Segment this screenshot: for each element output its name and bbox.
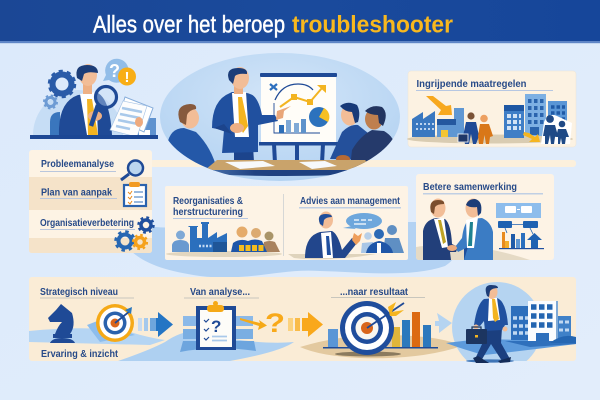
icon: factory	[412, 108, 464, 137]
arrow: small orange	[240, 318, 267, 330]
desk	[30, 135, 158, 139]
person group with halo	[541, 115, 572, 144]
heading: Ingrijpende maatregelen	[416, 78, 526, 90]
illustration: presentation scene	[160, 53, 400, 181]
label: van analyse: Van analyse...	[190, 287, 250, 298]
arrow: orange	[288, 312, 323, 337]
person: left colleague	[167, 104, 217, 172]
icon: downward arrow	[426, 96, 452, 115]
label: naar resultaat: ...naar resultaat	[340, 287, 409, 298]
person: analyst	[59, 64, 112, 135]
label: ervaring en inzicht: Ervaring & inzicht	[41, 349, 119, 360]
person: advisor	[305, 212, 362, 258]
icon: blue gear	[116, 232, 134, 250]
arrow: light blue	[435, 313, 452, 333]
person: walker with briefcase	[466, 285, 514, 363]
conference table	[208, 160, 366, 176]
heading: advies: Advies aan management	[300, 196, 401, 207]
arrow: blue	[138, 312, 173, 337]
list item: probleemanalyse: Probleemanalyse	[41, 159, 114, 170]
icon: big target	[335, 301, 404, 356]
icon: city buildings	[504, 94, 567, 138]
person: right colleague dark suit	[336, 106, 395, 168]
icon: clipboard: ?	[211, 317, 221, 336]
connector strip	[150, 160, 576, 167]
heading: reorganisaties	[173, 196, 248, 219]
icon: org chart	[496, 203, 541, 234]
person: handshake right	[447, 198, 493, 260]
panel: left list	[29, 150, 154, 253]
bar chart: growth	[499, 232, 544, 249]
icon: factory	[188, 222, 227, 252]
chair	[50, 112, 60, 135]
icon: navy gear	[138, 218, 154, 232]
header banner	[0, 0, 600, 44]
icon: chess knight	[48, 304, 75, 343]
icon: alert circle: !	[124, 69, 130, 86]
flip chart	[259, 73, 338, 162]
icon: small gear	[44, 96, 57, 108]
backdrop circle	[452, 282, 536, 361]
icon: question bubble: ?	[109, 61, 120, 81]
icon: documents	[110, 97, 156, 137]
speech bubble	[343, 213, 382, 229]
icon: briefcase	[466, 327, 487, 344]
bar chart: result	[323, 312, 438, 348]
icon: yellow arrow	[523, 132, 540, 142]
icon: clipboard	[180, 301, 256, 352]
audience	[361, 225, 404, 253]
person: presenter	[212, 67, 291, 162]
icon: question mark: ?	[265, 308, 285, 338]
heading: reorganisaties: herstructurering	[173, 207, 243, 218]
panel: betere samenwerking	[416, 174, 554, 260]
panel: ingrijpende maatregelen	[407, 71, 576, 147]
person: handshake left	[423, 198, 458, 260]
panel: reorganisaties and advies	[165, 186, 408, 260]
background wave	[125, 222, 455, 278]
icon: orange gear	[133, 235, 147, 249]
icon: target	[87, 304, 135, 342]
heading: reorganisaties: Reorganisaties &	[173, 196, 243, 207]
icon: team with gears	[231, 226, 280, 252]
icon: magnifier	[91, 86, 116, 126]
icon: large gear	[50, 72, 74, 96]
icon: faded person	[172, 230, 189, 252]
icon: city	[511, 301, 576, 343]
label: strategisch niveau: Strategisch niveau	[40, 287, 118, 298]
title: troubleshooter	[292, 12, 453, 38]
person orange	[478, 115, 493, 144]
person with briefcase	[458, 112, 479, 144]
list item: organisatieverbetering: Organisatieverbetering	[40, 218, 134, 229]
person: right colleague	[330, 103, 372, 160]
title: Alles over het beroep	[93, 12, 285, 38]
heading: Betere samenwerking	[423, 181, 517, 193]
panel: bottom route	[29, 277, 576, 372]
title	[93, 12, 453, 38]
list item: plan van aanpak: Plan van aanpak	[41, 188, 112, 198]
illustration: analyst at desk	[30, 59, 158, 139]
